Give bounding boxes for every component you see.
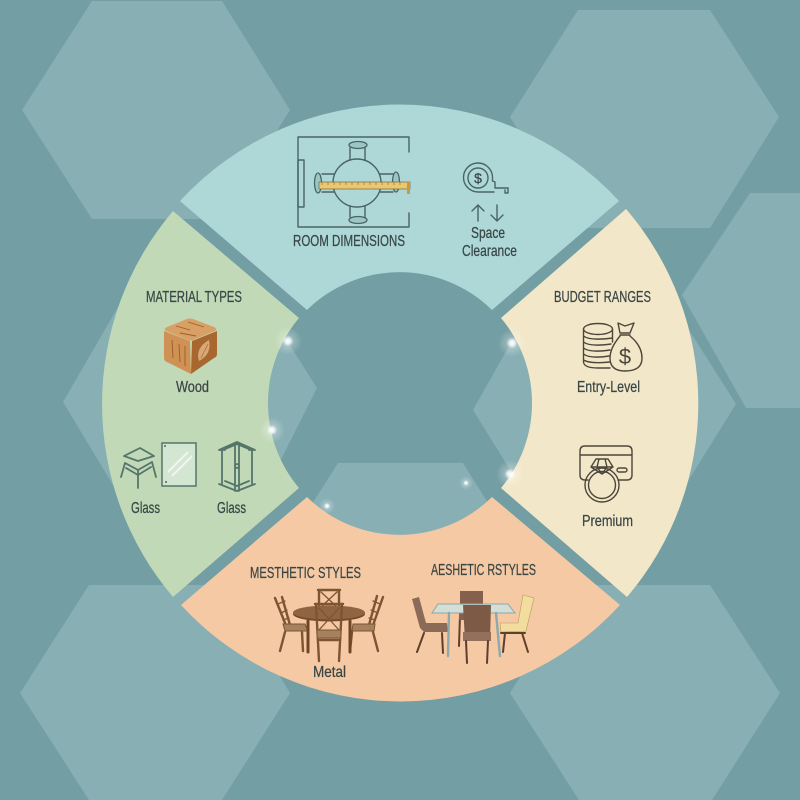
label: glass right: Glass [217, 500, 246, 517]
text: space clearance: Space [471, 225, 505, 242]
icon: wooden table and chairs [275, 590, 383, 661]
icon: tape measure [464, 163, 508, 193]
front chair [463, 605, 491, 663]
icon: coins and money bag: $ [619, 344, 631, 369]
icon: up and down arrows [472, 205, 503, 221]
back chair [459, 591, 483, 646]
segment: left [102, 211, 299, 597]
heading: budget ranges: BUDGET RANGES [554, 289, 651, 306]
icon: glass stool [121, 448, 156, 488]
sparkles [259, 327, 526, 514]
icon: room plan with table and tape [298, 137, 410, 227]
table [293, 606, 365, 652]
icon: glass panel [162, 443, 196, 486]
panel: budget ranges [501, 209, 698, 597]
icon: glass table with upholstered chairs [412, 591, 534, 663]
glass table legs [448, 613, 500, 656]
heading: room dimensions: ROOM DIMENSIONS [293, 233, 405, 250]
left chair [412, 597, 448, 653]
panel: material types [102, 211, 299, 597]
label: entry-level: Entry-Level [577, 379, 640, 396]
label: glass left: Glass [131, 500, 160, 517]
icon: wood cube [164, 318, 217, 374]
panel: room dimensions [180, 105, 619, 310]
label: premium: Premium [582, 513, 633, 530]
glass top [432, 604, 515, 613]
segment: bottom [181, 497, 620, 701]
icon: card and diamond ring [580, 446, 632, 502]
segment: top [180, 105, 619, 310]
yellow chair [500, 595, 534, 652]
left chair [275, 597, 308, 651]
label: metal: Metal [313, 664, 346, 681]
icon: glass cabinet [219, 442, 255, 491]
panel: aesthetic styles [181, 497, 620, 701]
icon: coins and money bag [584, 323, 642, 371]
icon: tape measure: $ [474, 170, 482, 186]
heading: material types: MATERIAL TYPES [146, 289, 242, 306]
heading: aeshetic rstyles: AESHETIC RSTYLES [431, 562, 536, 579]
label: wood: Wood [176, 379, 209, 396]
back chair [318, 590, 340, 610]
heading: mesthetic styles: MESTHETIC STYLES [250, 565, 361, 582]
right chair [350, 596, 383, 651]
text: space clearance: Clearance [462, 243, 517, 260]
segment: right [501, 209, 698, 597]
front chair [315, 604, 343, 661]
